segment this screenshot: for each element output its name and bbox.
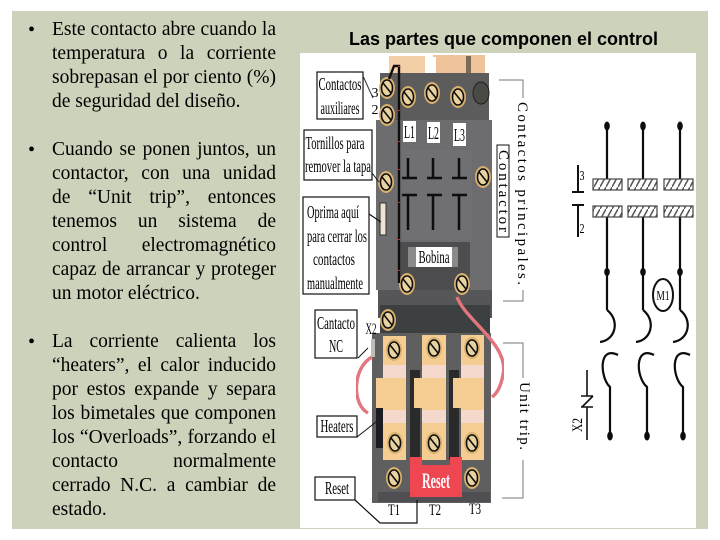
bracket: Unit trip: Unit trip. [516,382,532,450]
text block: heaters and overloads: los bimetales que componen [52,403,276,424]
label: Contactor: Contactor [495,150,511,232]
terminal labels T1 T2 T3: T3 [469,501,481,518]
terminal labels L1 L2 L3: L3 [454,125,465,145]
label: Oprima aqui: manualmente [307,273,363,293]
motor M1 [653,279,673,311]
pink wires [356,297,504,413]
main contacts [607,126,680,310]
terminal labels L1 L2 L3 [403,121,466,146]
text block: contactor and unit trip: control electromagnético [52,235,276,256]
text block: heaters and overloads: los “Overloads”, forzando el [52,427,276,448]
text block: contactor and unit trip: Cuando se ponen juntos, un [52,139,276,160]
label: Tornillos para remover la tapa [304,130,379,182]
schematic [570,122,693,440]
contact symbols [402,158,467,230]
text block: contactor and unit trip: tenemos un sistema de [52,211,276,232]
terminal labels T1 T2 T3 [388,501,481,519]
label: Oprima aqui [303,197,381,294]
terminal labels L1 L2 L3: L1 [404,122,415,142]
label: Cantacto NC: NC [329,336,343,356]
contactor lower body [372,290,492,503]
bullet 2: • [28,139,35,161]
contactor photo [356,55,504,503]
bracket: Contactos principales: Contactos principales. [514,102,530,285]
overload contact X2: X2 [570,418,586,432]
label: Contactos auxiliares: auxiliares [320,98,360,118]
label: Contactos auxiliares: 2 [372,103,378,118]
label: Contactos auxiliares [317,72,378,119]
text block: heaters and overloads: contacto normalmente [52,451,276,472]
text block: contactor and unit trip: un motor eléctrico. [52,283,200,304]
text block: heaters and overloads: estado. [52,499,107,520]
text block: contact opening: de seguridad del diseño. [52,91,240,112]
text block: contactor and unit trip: capaz de arrancar y proteger [52,259,276,280]
text block: contactor and unit trip: de “Unit trip”, entonces [52,187,276,208]
text block: contact opening: temperatura o la corriente [52,43,276,64]
auxiliary contact 3-2 [572,165,584,237]
text block: heaters and overloads: La corriente calienta los [52,331,276,352]
label: Cantacto NC [315,310,376,358]
label: Reset: Reset [325,478,349,498]
text block: contact opening [52,19,276,112]
terminal labels T1 T2 T3: T2 [429,502,441,519]
heater strips [376,335,484,460]
text block: contact opening: Este contacto abre cuando la [52,19,276,40]
label: Cantacto NC: Cantacto [317,313,355,333]
label: Oprima aqui: contactos [313,249,355,269]
text block: heaters and overloads: por estos expande y separa [52,379,276,400]
contactor upper body [376,73,492,290]
label: Contactos auxiliares: Contactos [318,74,362,94]
bullet 1: • [28,19,35,41]
motor M1: M1 [656,289,670,304]
text block: heaters and overloads: cerrado N.C. a cambiar de [52,475,276,496]
top terminals scraps [389,55,485,76]
label: Oprima aqui: Oprima aquí [307,202,359,222]
text block: contactor and unit trip [52,139,276,304]
text block: heaters and overloads [52,331,276,520]
label: Tornillos para remover la tapa: Tornillos para [306,133,365,153]
label: Oprima aqui: para cerrar los [307,226,367,246]
label: Bobina: Bobina [418,247,450,267]
label: Cantacto NC: X2 [366,321,376,338]
label: Contactos auxiliares: 3 [372,86,378,101]
terminal labels T1 T2 T3: T1 [388,502,400,519]
screws [378,77,491,489]
image background [300,53,696,528]
label: Reset [315,477,417,523]
auxiliary contact 3-2: 2 [580,222,584,237]
label: Bobina [416,247,452,267]
reset button: Reset [422,468,450,493]
text block: contactor and unit trip: contactor, con una unidad [52,163,276,184]
title: Las partes que componen el control [349,29,658,49]
bracket: Unit trip [502,343,532,498]
label: Tornillos para remover la tapa: remover la tapa [305,156,371,176]
terminal labels L1 L2 L3: L2 [428,123,439,143]
auxiliary contact 3-2: 3 [580,169,584,184]
label: Heaters: Heaters [320,416,354,436]
wire [389,66,399,283]
reset button [410,457,462,497]
bullet 3: • [28,331,35,353]
bracket: Contactos principales [499,80,530,301]
overload contact X2 [570,370,593,440]
text block: contact opening: sobrepasan el por ciento (%) [52,67,276,88]
text block: heaters and overloads: “heaters”, el calor inducido [52,355,276,376]
overload elements [600,310,690,436]
